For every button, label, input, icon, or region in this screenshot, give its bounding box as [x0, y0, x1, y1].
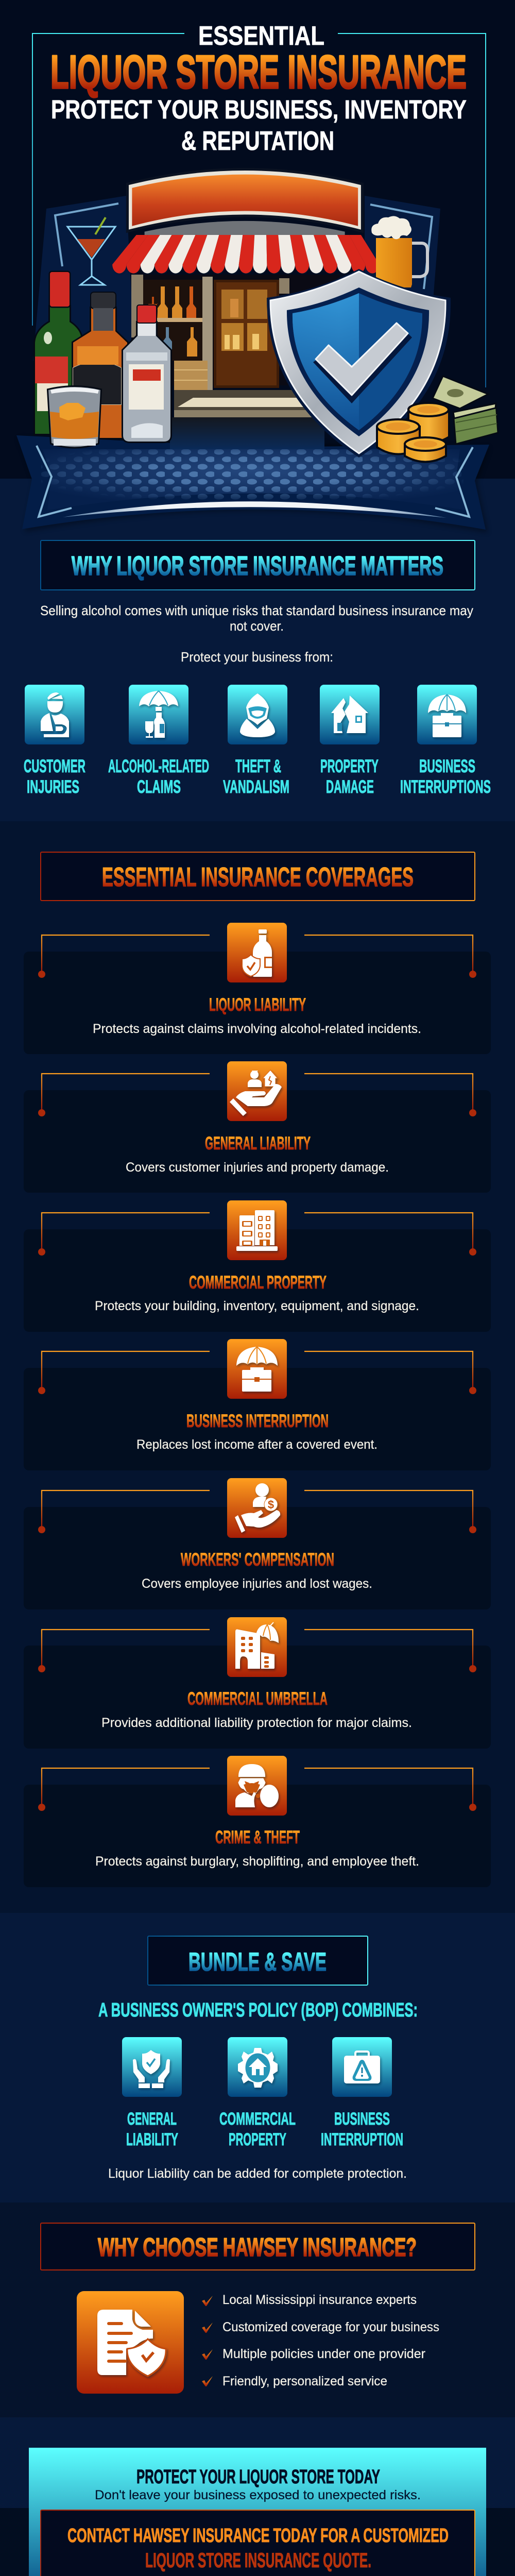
- coverage description: Covers employee injuries and lost wages.: [142, 1577, 372, 1591]
- icon: hand holding person and house: [230, 1070, 282, 1116]
- coverage description: Protects your building, inventory, equipment, and signage.: [95, 1299, 419, 1313]
- bundle note: Liquor Liability can be added for complete protection.: [108, 2166, 407, 2181]
- hero illustration: liquor store, bottles, shield and money: [16, 169, 498, 533]
- panel: why choose content: [77, 2291, 439, 2394]
- heading: essential insurance coverages: [41, 852, 475, 901]
- bundle: commercial property: COMMERCIAL: [219, 2109, 296, 2129]
- coverage title: CRIME & THEFT: [215, 1827, 300, 1848]
- bundle: business interruption: BUSINESS: [334, 2109, 390, 2129]
- awning: [112, 235, 380, 274]
- coverage description: Protects against claims involving alcohol-related incidents.: [93, 1022, 421, 1036]
- panel: business interruption: [24, 1339, 491, 1470]
- intro text: Selling alcohol comes with unique risks that standard business insurance may: [40, 603, 473, 618]
- heading: why liquor store insurance matters: [41, 540, 475, 590]
- risk: customer injuries: INJURIES: [27, 777, 79, 797]
- icon: wine bottle: [35, 272, 81, 434]
- icon: hand with person and coin: [235, 1483, 280, 1533]
- risk: alcohol-related claims: [108, 685, 209, 797]
- icon: vodka bottle: [123, 306, 170, 442]
- shelf bottles: [148, 286, 197, 357]
- panel: workers' compensation: [24, 1478, 491, 1609]
- store sign: [127, 169, 362, 231]
- risk: theft and vandalism: THEFT &: [235, 756, 281, 776]
- title: [50, 21, 467, 156]
- icon: money stack: [433, 376, 498, 444]
- risk: customer injuries: CUSTOMER: [24, 756, 85, 776]
- check item: Local Mississippi insurance experts: [222, 2293, 417, 2307]
- bundle: business interruption: INTERRUPTION: [321, 2130, 403, 2149]
- title line: reputation: & REPUTATION: [181, 126, 334, 156]
- coverage title: GENERAL LIABILITY: [205, 1133, 311, 1154]
- icon: masked thief with bag: [235, 1764, 279, 1807]
- risk: business interruptions: BUSINESS: [419, 756, 475, 776]
- check item: Multiple policies under one provider: [222, 2347, 425, 2361]
- coverage title: LIQUOR LIABILITY: [209, 995, 306, 1015]
- risk: theft and vandalism: VANDALISM: [223, 777, 289, 797]
- risk: theft and vandalism: [223, 685, 289, 797]
- intro text: Protect your business from:: [181, 649, 333, 665]
- title line: essential: ESSENTIAL: [198, 21, 324, 51]
- bundle: general liability: GENERAL: [127, 2109, 177, 2129]
- heading: bundle and save: [148, 1936, 368, 1985]
- panel: commercial property: [24, 1200, 491, 1332]
- checklist: [202, 2293, 439, 2388]
- icon: hand with person and coin: $: [268, 1498, 274, 1511]
- icon: whiskey bottle: [73, 293, 127, 438]
- heading: why choose hawsey insurance: [41, 2223, 475, 2270]
- cta subtext: Don't leave your business exposed to unexpected risks.: [95, 2488, 421, 2502]
- coverage description: Covers customer injuries and property damage.: [126, 1160, 389, 1175]
- bundle: general liability: [122, 2037, 182, 2149]
- icon: document with shield: [97, 2310, 166, 2376]
- hero frame: [32, 33, 486, 387]
- risk: customer injuries: [24, 685, 85, 797]
- icon: coins: [377, 403, 449, 462]
- heading: bundle and save: BUNDLE & SAVE: [188, 1947, 327, 1976]
- check item: Customized coverage for your business: [222, 2320, 439, 2334]
- panel: risks row: [24, 685, 491, 797]
- store front: [131, 275, 340, 449]
- bundle: commercial property: PROPERTY: [229, 2130, 286, 2149]
- cta heading: PROTECT YOUR LIQUOR STORE TODAY: [136, 2466, 380, 2488]
- icon: martini glass: [67, 217, 115, 285]
- risk: alcohol-related claims: CLAIMS: [137, 777, 181, 797]
- panel: crime and theft: [24, 1756, 491, 1887]
- coverage title: BUSINESS INTERRUPTION: [186, 1411, 329, 1431]
- coverage description: Provides additional liability protection for major claims.: [101, 1716, 412, 1730]
- bundle: general liability: LIABILITY: [126, 2130, 178, 2149]
- hero base ribbon: [16, 435, 489, 533]
- panel: general liability: [24, 1061, 491, 1193]
- coverage title: COMMERCIAL UMBRELLA: [187, 1689, 328, 1709]
- coverage description: Protects against burglary, shoplifting, and employee theft.: [95, 1854, 419, 1869]
- panel: call to action: [29, 2448, 486, 2576]
- risk: business interruptions: [400, 685, 491, 797]
- panel: bundle items: [122, 2037, 403, 2149]
- bundle: commercial property: [219, 2037, 296, 2149]
- icon: shield with check: [267, 269, 451, 457]
- panel: commercial umbrella: [24, 1617, 491, 1749]
- coverage description: Replaces lost income after a covered event.: [136, 1437, 377, 1452]
- risk: property damage: DAMAGE: [326, 777, 374, 797]
- bundle: business interruption: [321, 2037, 403, 2149]
- icon: building with umbrella: [235, 1622, 279, 1669]
- coverage title: COMMERCIAL PROPERTY: [189, 1273, 327, 1293]
- risk: property damage: [320, 685, 380, 797]
- intro text: not cover.: [230, 618, 284, 634]
- check item: Friendly, personalized service: [222, 2374, 387, 2388]
- icon: umbrella over briefcase: [236, 1347, 278, 1392]
- icon: buildings: [236, 1210, 278, 1251]
- icon: bottle with shield: [242, 929, 272, 977]
- risk: property damage: PROPERTY: [320, 756, 379, 776]
- cta contact box: [41, 2510, 475, 2576]
- coverage title: WORKERS' COMPENSATION: [181, 1550, 334, 1570]
- panel: liquor liability: [24, 923, 491, 1054]
- store sign and awning: [112, 169, 380, 274]
- icon: beer mug: [371, 216, 427, 287]
- neon backing panels: [33, 196, 440, 361]
- intro text: [40, 603, 473, 665]
- risk: alcohol-related claims: ALCOHOL-RELATED: [108, 756, 209, 776]
- icon: whisky glass: [48, 387, 100, 447]
- cta contact box: LIQUOR STORE INSURANCE QUOTE.: [145, 2549, 371, 2572]
